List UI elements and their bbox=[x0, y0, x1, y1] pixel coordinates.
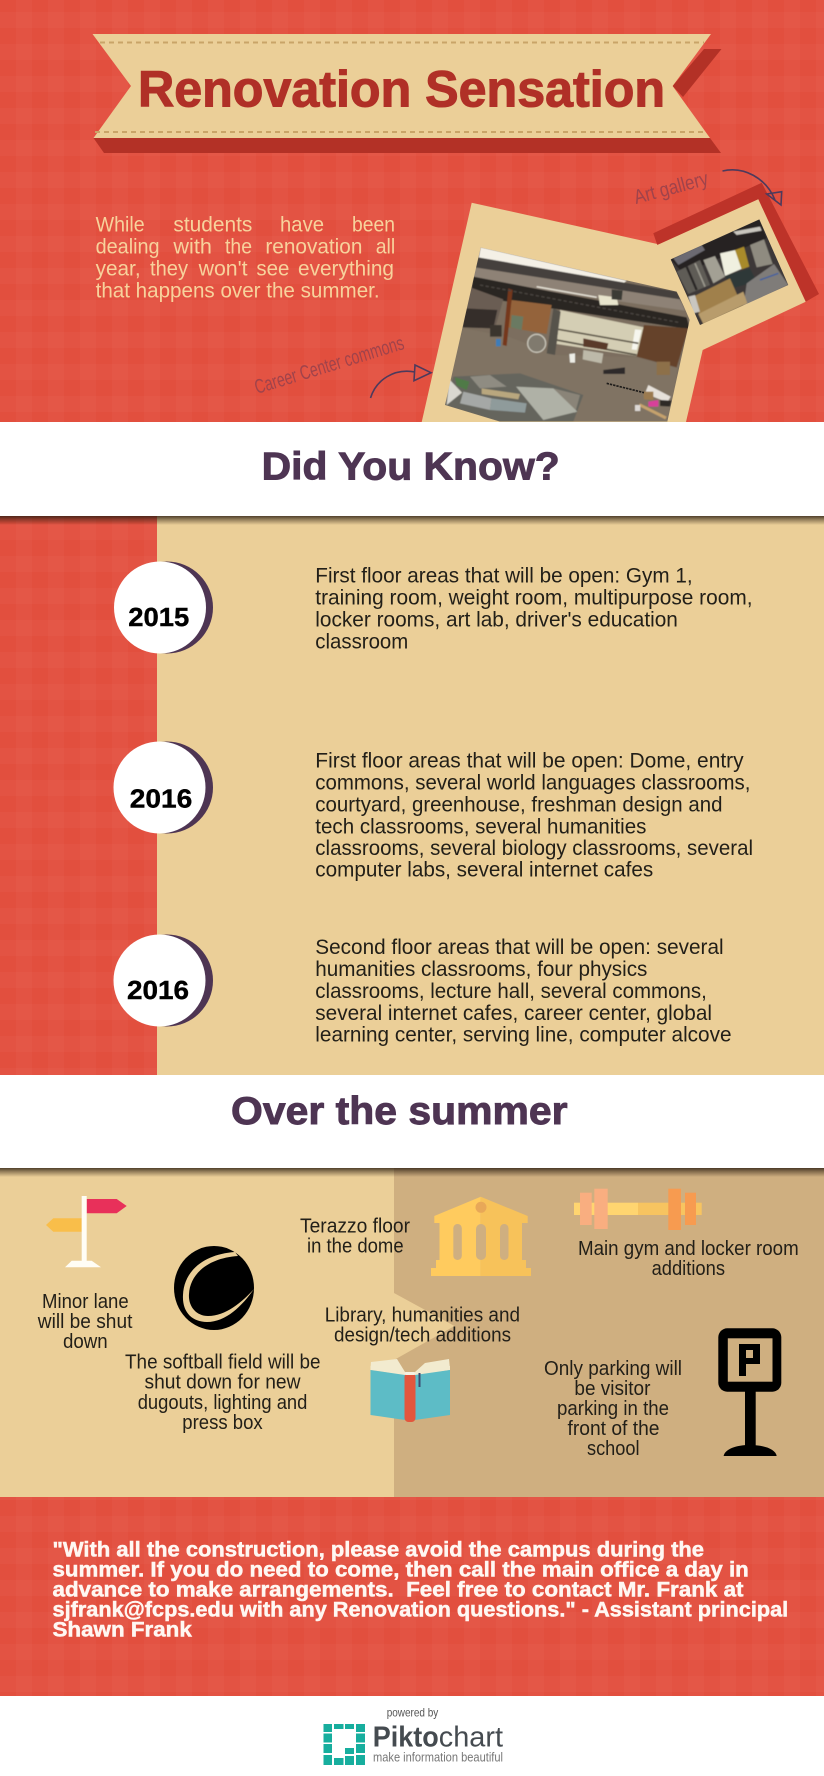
text: Only parking bbox=[544, 1358, 682, 1460]
intro text: the bbox=[225, 236, 252, 259]
quote text: advance to make arrangements. Feel free to contact Mr. Frank at bbox=[52, 1579, 744, 1602]
text: Library: Library, humanities and bbox=[325, 1305, 520, 1327]
intro text: they bbox=[150, 258, 188, 281]
text: softball field: press box bbox=[182, 1412, 263, 1434]
text: Only parking: be visitor bbox=[574, 1378, 651, 1400]
icon: book bbox=[370, 1359, 450, 1422]
text: Minor lane bbox=[37, 1291, 133, 1353]
text: 2016 second floor areas: learning center, serving line, computer alcove bbox=[315, 1024, 732, 1047]
text: 2016 first floor areas: commons, several world languages classrooms, bbox=[315, 771, 750, 794]
text: softball field: dugouts, lighting and bbox=[138, 1392, 307, 1414]
intro text: have bbox=[280, 214, 324, 237]
icon: dome building bbox=[431, 1197, 531, 1276]
intro text: all bbox=[376, 236, 395, 259]
icon: softball bbox=[174, 1246, 254, 1330]
text: 2016 second floor areas bbox=[315, 936, 732, 1047]
icon: signpost bbox=[46, 1196, 127, 1267]
intro text: been bbox=[352, 214, 395, 237]
panel: over the summer bbox=[0, 1168, 824, 1497]
heading: Over the summer: Over the summer bbox=[231, 1090, 568, 1133]
text: 2015 areas: training room, weight room, multipurpose room, bbox=[315, 586, 752, 609]
timeline badge: 2015 bbox=[114, 562, 213, 654]
text: Only parking: parking in the bbox=[557, 1398, 669, 1420]
icon: dumbbell bbox=[574, 1189, 702, 1230]
photo card: Art gallery bbox=[650, 183, 819, 350]
quote text: "With all the construction, please avoid the campus during the bbox=[52, 1539, 704, 1562]
intro text: year, bbox=[96, 258, 141, 281]
quote text: Shawn Frank bbox=[52, 1619, 192, 1642]
intro text: won't bbox=[198, 258, 248, 281]
text: Only parking: front of the bbox=[568, 1418, 660, 1440]
text: Terazzo floor: Terazzo floor bbox=[300, 1216, 410, 1238]
text: Main gym: additions bbox=[652, 1258, 725, 1280]
intro text: While bbox=[96, 214, 145, 237]
text: 2016 second floor areas: humanities classrooms, four physics bbox=[315, 958, 647, 981]
footer: Piktochart logo: Pikto bbox=[373, 1722, 439, 1754]
label and arrow: Career Center commons bbox=[252, 332, 431, 399]
quote text: summer. If you do need to come, then call the main office a day in bbox=[52, 1559, 749, 1582]
text: Minor lane: will be shut bbox=[37, 1311, 133, 1333]
label and arrow: Art gallery: Art gallery bbox=[632, 168, 711, 209]
quote text: sjfrank@fcps.edu with any Renovation questions." - Assistant principal bbox=[52, 1599, 788, 1622]
text: 2016 first floor areas: computer labs, several internet cafes bbox=[315, 859, 653, 882]
intro text: see bbox=[256, 258, 289, 281]
text: 2016 first floor areas: courtyard, greenhouse, freshman design and bbox=[315, 793, 722, 816]
intro text: dealing bbox=[96, 236, 160, 259]
panel: timeline bbox=[0, 516, 824, 1075]
footer: Piktochart logo: make information beautiful bbox=[373, 1751, 503, 1765]
text: Only parking: school bbox=[587, 1438, 640, 1460]
footer: Piktochart logo: powered by bbox=[387, 1706, 438, 1720]
label and arrow: Art gallery bbox=[632, 168, 782, 209]
text: Minor lane: down bbox=[63, 1331, 108, 1353]
text: 2016 first floor areas: tech classrooms, several humanities bbox=[315, 815, 646, 838]
text: 2016 second floor areas: Second floor areas that will be open: several bbox=[315, 936, 724, 959]
icon: Piktochart mark bbox=[324, 1724, 365, 1765]
photo: art gallery construction bbox=[670, 220, 788, 325]
footer: Piktochart logo bbox=[324, 1706, 503, 1765]
intro text: everything bbox=[298, 258, 394, 281]
title ribbon bbox=[92, 34, 722, 153]
intro text: that happens over the summer. bbox=[96, 280, 380, 303]
photo: Career Center commons construction bbox=[445, 248, 690, 422]
text: 2016 second floor areas: classrooms, lecture hall, several commons, bbox=[315, 980, 707, 1003]
title: Renovation Sensation bbox=[138, 61, 665, 118]
label and arrow: Career Center commons: Career Center commons bbox=[252, 332, 407, 399]
panel: header background bbox=[0, 0, 824, 422]
intro text: renovation bbox=[265, 236, 362, 259]
footer: Piktochart logo: chart bbox=[439, 1722, 503, 1754]
text: Library: design/tech additions bbox=[334, 1325, 511, 1347]
text: 2016 first floor areas: First floor areas that will be open: Dome, entry bbox=[315, 749, 744, 772]
text: softball field bbox=[125, 1351, 320, 1434]
text: 2016 first floor areas: classrooms, several biology classrooms, several bbox=[315, 837, 753, 860]
text: Main gym bbox=[578, 1238, 799, 1280]
timeline badge: 2016 first floor bbox=[114, 742, 213, 834]
quote text bbox=[52, 1539, 788, 1642]
text: 2015 areas: First floor areas that will be open: Gym 1, bbox=[315, 564, 693, 587]
intro text: with bbox=[172, 236, 212, 259]
text: 2015 areas bbox=[315, 564, 752, 653]
text: Only parking: Only parking will bbox=[544, 1358, 682, 1380]
text: 2015 areas: classroom bbox=[315, 630, 408, 653]
text: Main gym: Main gym and locker room bbox=[578, 1238, 799, 1260]
timeline badge: 2016 second floor: 2016 bbox=[127, 975, 189, 1005]
text: 2016 second floor areas: several internet cafes, career center, global bbox=[315, 1002, 712, 1025]
text: 2015 areas: locker rooms, art lab, driver's education bbox=[315, 608, 678, 631]
intro text bbox=[96, 214, 395, 303]
text: Terazzo floor bbox=[300, 1216, 410, 1258]
text: Minor lane: Minor lane bbox=[42, 1291, 129, 1313]
timeline badge: 2015: 2015 bbox=[128, 602, 189, 632]
text: Library bbox=[325, 1305, 520, 1347]
intro text: students bbox=[173, 214, 252, 237]
text: Terazzo floor: in the dome bbox=[307, 1236, 404, 1258]
photo card: Career Center commons bbox=[422, 202, 703, 422]
icon: parking sign bbox=[718, 1328, 781, 1456]
timeline badge: 2016 first floor: 2016 bbox=[130, 784, 192, 814]
text: softball field: The softball field will be bbox=[125, 1351, 320, 1373]
panel: quote bbox=[0, 1497, 824, 1696]
heading: Did You Know?: Did You Know? bbox=[262, 445, 560, 488]
text: softball field: shut down for new bbox=[144, 1372, 301, 1394]
timeline badge: 2016 second floor bbox=[114, 934, 213, 1026]
text: 2016 first floor areas bbox=[315, 749, 753, 882]
